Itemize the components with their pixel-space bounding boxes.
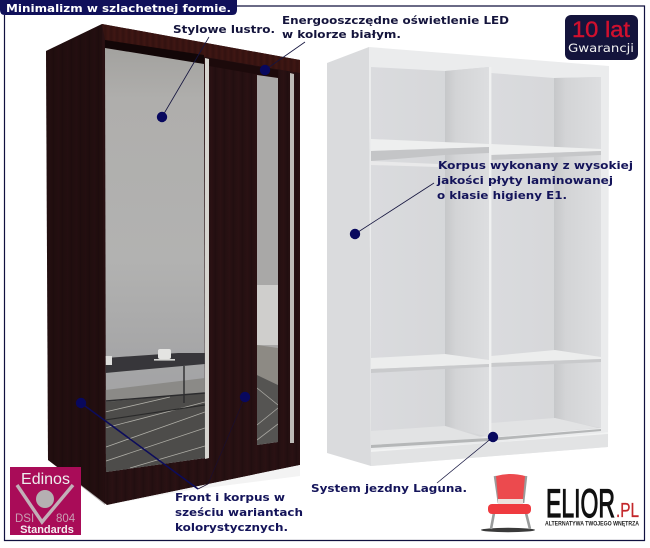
label: led lighting: [282, 14, 509, 41]
title: [0, 0, 237, 15]
centre divider: [489, 67, 491, 439]
silver strip left: [205, 58, 209, 459]
interior right column: [491, 73, 601, 437]
title: Minimalizm w szlachetnej formie.: [6, 3, 231, 15]
white wardrobe: [327, 47, 609, 466]
interior left column: [371, 67, 489, 447]
label: body material: jakości płyty laminowanej: [436, 174, 613, 187]
hanging rail: [371, 161, 438, 167]
wardrobe body: [46, 24, 300, 505]
label: body material: [436, 159, 633, 202]
dark wardrobe: [46, 24, 300, 505]
bottom floors: [371, 426, 484, 447]
label: front colours: sześciu wariantach: [175, 506, 303, 519]
label: mirror: Stylowe lustro.: [173, 23, 275, 36]
interior left side wall: [445, 67, 489, 437]
label: front colours: kolorystycznych.: [175, 521, 288, 534]
badge: Edinos standards: [10, 467, 81, 536]
lower shelves: [371, 354, 489, 369]
badge: 10 year warranty: Gwarancji: [568, 41, 634, 55]
label: body material: o klasie higieny E1.: [437, 189, 567, 202]
badge: Edinos standards: Edinos: [21, 471, 70, 488]
interior right side wall: [554, 77, 601, 428]
leader lines: [81, 37, 493, 489]
logo: ELIOR.PL: .PL: [616, 500, 639, 522]
label: sliding system: System jezdny Laguna.: [311, 482, 467, 495]
large mirror: [105, 48, 205, 475]
cup reflection: [158, 349, 171, 359]
callout dots: [76, 65, 498, 442]
badge: Edinos standards: Standards: [20, 524, 74, 536]
table reflection: [105, 353, 205, 373]
logo: chair: [481, 474, 535, 532]
floor reflection: [105, 378, 205, 475]
door shadow rail: [105, 40, 204, 64]
badge: 10 year warranty: [565, 15, 638, 60]
silver strip right: [290, 73, 294, 443]
badge: Edinos standards: DSI: [15, 513, 34, 525]
white side panel: [327, 47, 371, 466]
badge: 10 year warranty: 10 lat: [572, 17, 630, 42]
label: front colours: [175, 491, 303, 534]
rug reflection: [105, 393, 205, 473]
wardrobe top band: [102, 24, 300, 73]
small mirror: [257, 75, 278, 447]
plinth: [371, 434, 608, 466]
label: led lighting: w kolorze białym.: [282, 28, 401, 41]
label: body material: Korpus wykonany z wysokiej: [438, 159, 633, 172]
label: front colours: Front i korpus w: [175, 491, 285, 504]
label: led lighting: Energooszczędne oświetlenie LED: [282, 14, 509, 27]
shadow under dark wardrobe: [107, 465, 300, 505]
upper shelves: [371, 139, 489, 151]
white front frame: [369, 47, 609, 466]
wardrobe side panel shade: [46, 24, 105, 505]
badge: Edinos standards: 804: [56, 513, 76, 525]
